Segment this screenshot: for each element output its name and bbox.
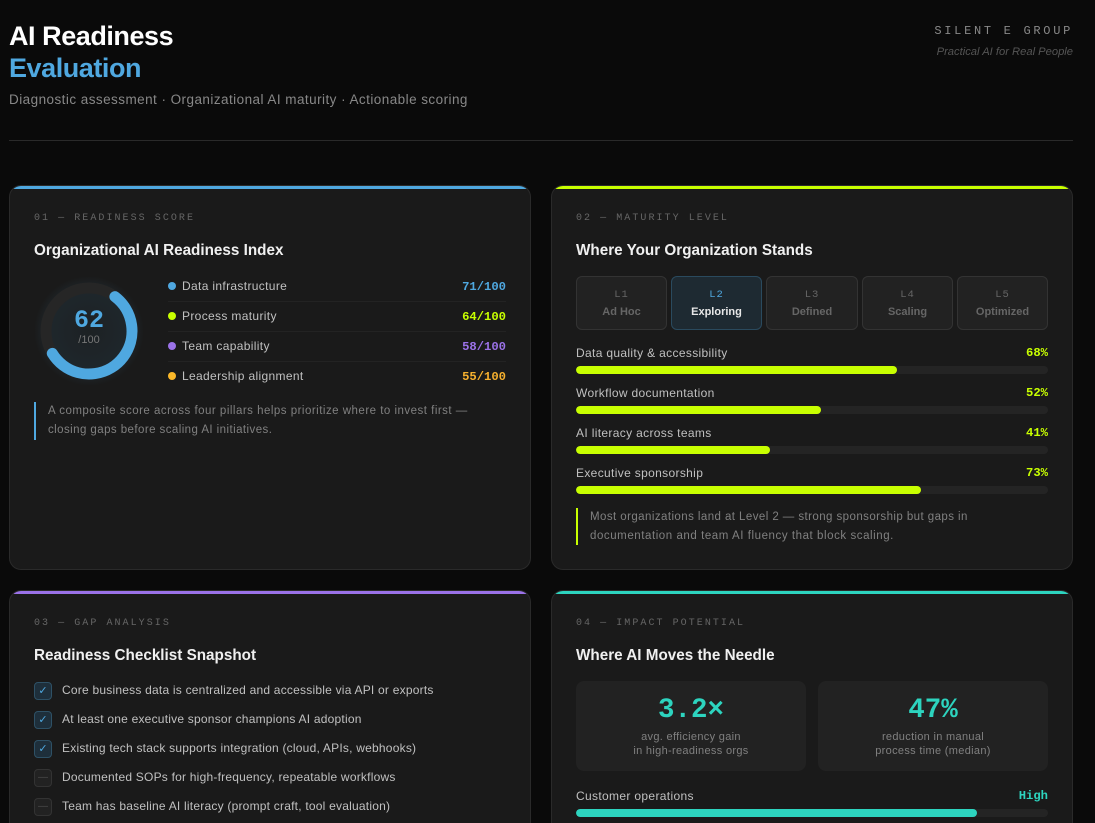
card 1 heading: Organizational AI Readiness Index bbox=[34, 242, 283, 259]
card 1 callout: A composite score across four pillars helps prioritize where to invest first — bbox=[48, 405, 468, 417]
brand name: SILENT E GROUP bbox=[934, 24, 1073, 38]
maturity level selector bbox=[576, 276, 1048, 330]
maturity bars: Workflow documentation bbox=[576, 386, 715, 400]
card 4 heading: Where AI Moves the Needle bbox=[576, 647, 775, 664]
donut chart: score 62 of 100 bbox=[40, 282, 138, 380]
maturity bars: 52% bbox=[1026, 386, 1048, 400]
impact bar: customer operations: Customer operations bbox=[576, 789, 694, 803]
pillar scores list: 64/100 bbox=[462, 310, 506, 324]
pillar scores list: Team capability bbox=[182, 339, 270, 353]
panel: readiness score bbox=[9, 185, 531, 570]
header title bbox=[9, 21, 173, 83]
card 2 callout: documentation and team AI fluency that block scaling. bbox=[590, 530, 894, 542]
checklist: Team has baseline AI literacy (prompt craft, tool evaluation) bbox=[62, 799, 390, 813]
checklist: Documented SOPs for high-frequency, repeatable workflows bbox=[62, 770, 396, 784]
stat: efficiency gain bbox=[576, 681, 806, 771]
stat: efficiency gain: in high-readiness orgs bbox=[633, 745, 749, 757]
checklist: At least one executive sponsor champions AI adoption bbox=[62, 712, 362, 726]
checklist: Existing tech stack supports integration (cloud, APIs, webhooks) bbox=[62, 741, 416, 755]
card 4 section label: 04 — IMPACT POTENTIAL bbox=[576, 618, 745, 629]
maturity level selector: Ad Hoc bbox=[602, 306, 641, 318]
pillar scores list: 58/100 bbox=[462, 340, 506, 354]
panel: maturity level bbox=[551, 185, 1073, 570]
card 1 callout: closing gaps before scaling AI initiatives. bbox=[48, 424, 272, 436]
impact bar: customer operations bbox=[576, 789, 1048, 817]
checklist: ✓ bbox=[38, 713, 48, 726]
panel: impact potential bbox=[551, 590, 1073, 823]
card 3 section label: 03 — GAP ANALYSIS bbox=[34, 618, 171, 629]
card 2 callout: Most organizations land at Level 2 — strong sponsorship but gaps in bbox=[590, 511, 968, 523]
pillar scores list: Leadership alignment bbox=[182, 369, 304, 383]
card 1 callout bbox=[34, 402, 468, 440]
pillar scores list: Data infrastructure bbox=[182, 279, 287, 293]
header title: AI Readiness bbox=[9, 21, 173, 51]
maturity bars: 73% bbox=[1026, 466, 1048, 480]
maturity level selector: L1 bbox=[614, 289, 629, 301]
maturity level selector: L3 bbox=[805, 289, 819, 301]
checklist: Core business data is centralized and accessible via API or exports bbox=[62, 683, 434, 697]
card 1 section label: 01 — READINESS SCORE bbox=[34, 213, 195, 224]
checklist: ✓ bbox=[38, 742, 48, 755]
card 2 section label: 02 — MATURITY LEVEL bbox=[576, 213, 729, 224]
checklist bbox=[34, 682, 434, 816]
maturity bars: 68% bbox=[1026, 346, 1048, 360]
impact bar: customer operations: High bbox=[1019, 789, 1048, 803]
stat: efficiency gain: avg. efficiency gain bbox=[641, 731, 741, 743]
brand tagline: Practical AI for Real People bbox=[937, 46, 1073, 58]
stat: manual time reduction: process time (median) bbox=[875, 745, 991, 757]
stat: manual time reduction bbox=[818, 681, 1048, 771]
header subtitle: Diagnostic assessment · Organizational AI maturity · Actionable scoring bbox=[9, 92, 468, 107]
maturity bars: AI literacy across teams bbox=[576, 426, 712, 440]
maturity bars: Executive sponsorship bbox=[576, 466, 703, 480]
donut chart: score 62 of 100: /100 bbox=[78, 334, 100, 346]
checklist: ✓ bbox=[38, 684, 48, 697]
maturity bars: 41% bbox=[1026, 426, 1048, 440]
pillar scores list: Process maturity bbox=[182, 309, 277, 323]
checklist: — bbox=[38, 772, 48, 783]
maturity level selector: L4 bbox=[900, 289, 915, 301]
checklist: — bbox=[38, 801, 48, 812]
maturity level selector: Exploring bbox=[691, 306, 742, 318]
card 2 heading: Where Your Organization Stands bbox=[576, 242, 813, 259]
maturity level selector: L5 bbox=[995, 289, 1010, 301]
stat: manual time reduction: 47% bbox=[908, 695, 958, 726]
pillar scores list: 71/100 bbox=[462, 280, 506, 294]
card 2 callout bbox=[576, 508, 968, 545]
maturity level selector: Defined bbox=[792, 306, 832, 318]
pillar scores list bbox=[168, 279, 506, 384]
maturity level selector: Optimized bbox=[976, 306, 1029, 318]
maturity bars bbox=[576, 346, 1048, 494]
card 3 heading: Readiness Checklist Snapshot bbox=[34, 647, 256, 664]
header title: Evaluation bbox=[9, 53, 141, 83]
maturity level selector: Scaling bbox=[888, 306, 927, 318]
stat: efficiency gain: 3.2× bbox=[658, 695, 724, 726]
maturity bars: Data quality & accessibility bbox=[576, 346, 728, 360]
pillar scores list: 55/100 bbox=[462, 370, 506, 384]
panel: gap analysis bbox=[9, 590, 531, 823]
donut chart: score 62 of 100: 62 bbox=[74, 306, 104, 335]
stat: manual time reduction: reduction in manual bbox=[882, 731, 984, 743]
maturity level selector: L2 bbox=[709, 289, 724, 301]
